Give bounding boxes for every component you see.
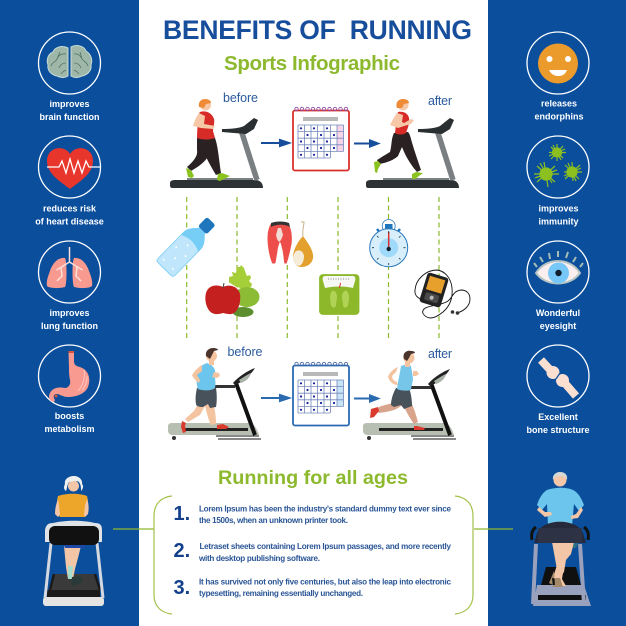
treadmill before: [168, 368, 261, 440]
icon: eye: [527, 241, 589, 303]
treadmill after: [363, 369, 456, 440]
item 2: with desktop publishing software.: [198, 554, 320, 563]
icon: weighing scale: [318, 274, 360, 316]
label: before: before: [223, 91, 258, 105]
panel: right benefits column: [474, 0, 626, 626]
item 3: It has survived not only five centuries, but also the leap into electronic: [199, 578, 451, 586]
item 3: typesetting, remaining essentially unchanged.: [199, 589, 363, 598]
treadmill row: man: [168, 345, 456, 440]
treadmill after: [366, 118, 459, 188]
item 2: 2.: [174, 540, 190, 562]
older woman on treadmill: [43, 476, 104, 606]
calendar: red: [293, 107, 349, 170]
label: heart: of heart disease: [35, 216, 104, 226]
label: smiley: releases: [541, 98, 577, 108]
icon: brain: [38, 32, 100, 94]
item 1: 1.: [174, 503, 190, 525]
icon: heart: [38, 136, 101, 198]
label: brain: brain function: [40, 112, 100, 122]
heading: running for all ages: Running for all ages: [218, 467, 408, 489]
label: heart: reduces risk: [43, 204, 96, 214]
label: brain: improves: [49, 99, 90, 109]
older man on treadmill: [532, 472, 591, 606]
label: before: before: [228, 345, 263, 359]
item 1: the 1500s, when an unknown printer took.: [199, 516, 348, 525]
label: stomach: metabolism: [44, 424, 95, 434]
title: BENEFITS OF RUNNING: [163, 15, 472, 45]
man after: [370, 351, 425, 430]
icon: smiley: [527, 32, 589, 94]
label: eye: eyesight: [540, 321, 576, 331]
man before: [181, 348, 229, 433]
panel: left benefits column: [0, 0, 154, 626]
item 1: Lorem Ipsum has been the industry's standard dummy text ever since: [199, 504, 451, 514]
icon: stomach: [38, 345, 100, 407]
label: eye: Wonderful: [536, 308, 580, 318]
arrow: [261, 140, 289, 146]
icon: immunity germs: [527, 136, 589, 198]
label: smiley: endorphins: [534, 112, 584, 122]
icon: salmon and chicken: [267, 222, 313, 267]
arrow: [261, 395, 289, 401]
icon: apple and greens: [205, 265, 260, 317]
arrow: [354, 396, 378, 402]
item 2: [174, 540, 451, 563]
calendar: blue: [293, 362, 349, 426]
label: stomach: boosts: [55, 411, 84, 421]
icon: lungs: [38, 241, 100, 303]
label: bone: bone structure: [526, 425, 590, 435]
woman after: [374, 99, 423, 179]
woman before: [186, 99, 230, 181]
subtitle: Sports Infographic: [224, 52, 400, 75]
item 2: Letraset sheets containing Lorem Ipsum passages, and more recently: [200, 542, 451, 551]
treadmill row: woman: [170, 91, 459, 188]
label: bone: Excellent: [538, 412, 578, 422]
treadmill before: [170, 118, 263, 188]
connector: left: [113, 528, 154, 530]
arrow: [354, 140, 378, 146]
icon: music player with earphones: [415, 270, 470, 318]
panel: bracketed list: [154, 496, 473, 614]
icon: bone joint: [527, 345, 589, 407]
panel: dashed dividers: [187, 197, 439, 340]
label: after: after: [428, 94, 452, 108]
label: lungs: improves: [49, 308, 90, 318]
label: immunity: immunity: [538, 216, 579, 226]
label: lungs: lung function: [41, 321, 98, 331]
label: after: after: [428, 347, 452, 361]
icon: water bottle: [156, 212, 220, 277]
label: immunity: improves: [538, 204, 579, 214]
item 1: [174, 503, 451, 525]
item 3: [174, 577, 451, 599]
icon: stopwatch: [370, 220, 408, 267]
connector: right: [474, 528, 513, 530]
item 3: 3.: [174, 577, 190, 599]
